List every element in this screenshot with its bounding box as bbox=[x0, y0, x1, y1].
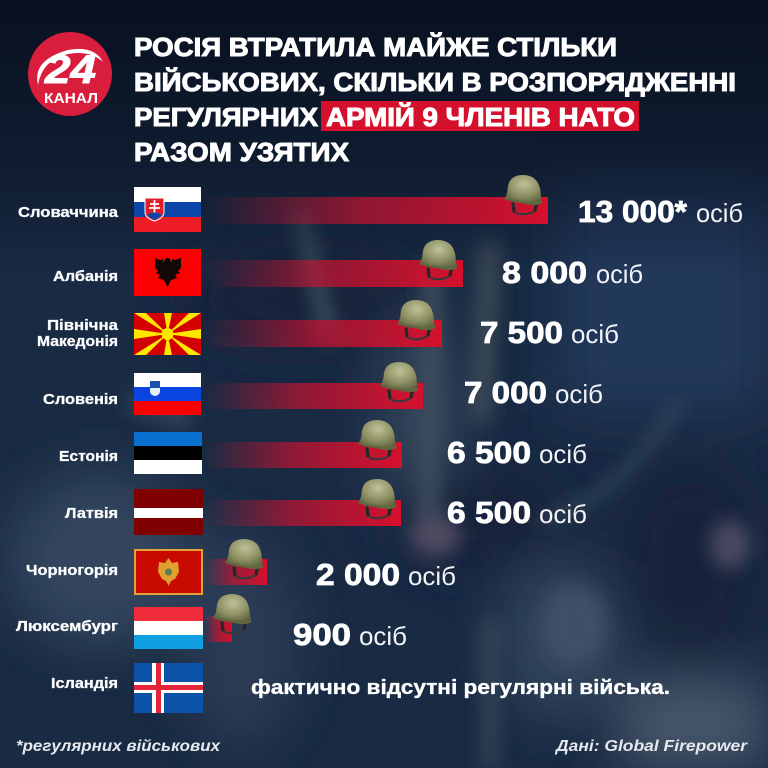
row: Luxembourg: Люксембург bbox=[16, 619, 118, 635]
row: Latvia bbox=[65, 479, 587, 535]
footnote: *регулярних військових bbox=[16, 738, 221, 755]
title: РОСІЯ ВТРАТИЛА МАЙЖЕ СТІЛЬКИ bbox=[134, 32, 617, 62]
title: АРМІЙ 9 ЧЛЕНІВ НАТО bbox=[326, 102, 635, 132]
row: Slovenia: 7 000 bbox=[464, 376, 547, 410]
title highlight bbox=[321, 101, 639, 131]
title: РАЗОМ УЗЯТИХ bbox=[134, 139, 349, 167]
row: Estonia: осіб bbox=[539, 439, 587, 469]
row: Montenegro: Чорногорія bbox=[26, 563, 118, 579]
row: Luxembourg: 900 bbox=[293, 618, 351, 652]
row: Albania: осіб bbox=[596, 259, 643, 289]
row: Albania bbox=[53, 240, 643, 296]
source: Дані: Global Firepower bbox=[554, 738, 748, 755]
row: Albania: 8 000 bbox=[502, 256, 587, 290]
row: Luxembourg bbox=[16, 594, 407, 652]
row: Estonia bbox=[59, 420, 587, 474]
row: Slovakia bbox=[18, 175, 743, 232]
row: Montenegro: осіб bbox=[408, 561, 456, 591]
row: Iceland: фактично відсутні регулярні війська. bbox=[251, 677, 670, 699]
row: Iceland: Ісландія bbox=[51, 676, 118, 692]
row: Slovenia: Словенія bbox=[43, 392, 118, 408]
row: Slovenia bbox=[43, 362, 603, 415]
title: ВІЙСЬКОВИХ, СКІЛЬКИ В РОЗПОРЯДЖЕННІ bbox=[134, 67, 736, 97]
row: Iceland bbox=[51, 663, 670, 713]
row: Latvia: 6 500 bbox=[447, 496, 531, 530]
row: Montenegro bbox=[26, 539, 456, 594]
row: North Macedonia: Північна bbox=[47, 318, 119, 334]
row: North Macedonia: осіб bbox=[571, 319, 619, 349]
row: Latvia: Латвія bbox=[65, 506, 118, 522]
row: Slovakia: 13 000* bbox=[578, 195, 687, 229]
title: РЕГУЛЯРНИХ bbox=[134, 104, 318, 132]
row: Slovakia: Словаччина bbox=[18, 205, 119, 221]
row: Albania: Албанія bbox=[53, 269, 118, 285]
row: Luxembourg: осіб bbox=[359, 621, 407, 651]
row: North Macedonia: Македонія bbox=[37, 334, 118, 350]
row: North Macedonia: 7 500 bbox=[480, 316, 563, 350]
logo: 24 Канал: 24 bbox=[44, 48, 96, 92]
title bbox=[134, 32, 736, 167]
row: North Macedonia bbox=[37, 300, 619, 355]
row: Slovakia: осіб bbox=[696, 198, 743, 228]
row: Estonia: 6 500 bbox=[447, 436, 531, 470]
logo: 24 Канал: КАНАЛ bbox=[44, 90, 98, 107]
logo: 24 Канал bbox=[28, 32, 112, 116]
row: Estonia: Естонія bbox=[59, 449, 118, 465]
row: Slovenia: осіб bbox=[555, 379, 603, 409]
row: Montenegro: 2 000 bbox=[316, 558, 400, 592]
row: Latvia: осіб bbox=[539, 499, 587, 529]
